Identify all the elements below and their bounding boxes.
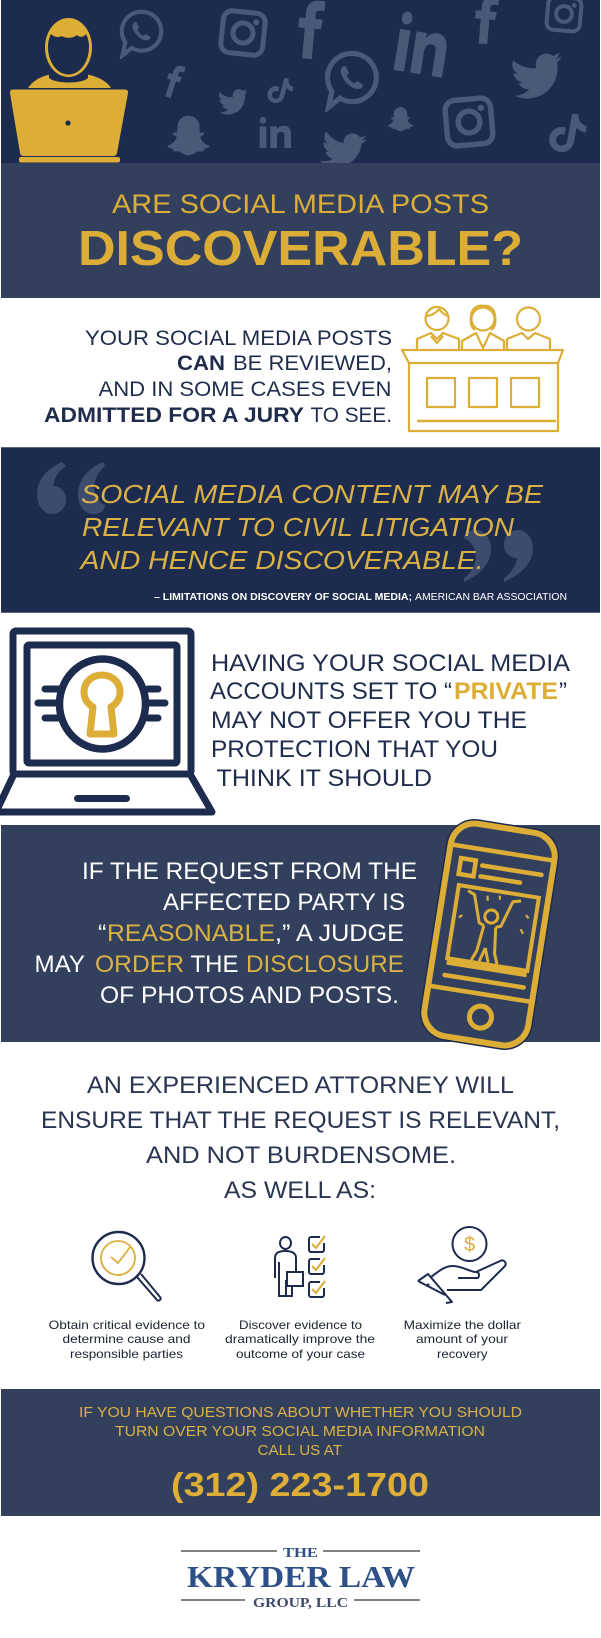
icon: snapchat large <box>168 116 209 155</box>
icon: hand holding dollar coin <box>418 1227 506 1303</box>
text block: reasonable request: DISCLOSURE <box>246 951 404 978</box>
call to action text: IF YOU HAVE QUESTIONS ABOUT WHETHER YOU SHOULD <box>79 1405 522 1421</box>
icon: closing quote mark <box>464 530 533 582</box>
text block: reasonable request: “ <box>98 920 106 947</box>
quote attribution: – LIMITATIONS ON DISCOVERY OF SOCIAL MEDIA; <box>154 592 412 603</box>
quote attribution <box>154 592 567 603</box>
text block: private accounts: ” <box>559 678 567 705</box>
text block: reasonable request: OF PHOTOS AND POSTS. <box>100 982 399 1009</box>
icon: twitter large <box>509 51 567 101</box>
icon: linkedin small <box>260 117 291 148</box>
icon: person at laptop <box>10 18 128 162</box>
call to action text: TURN OVER YOUR SOCIAL MEDIA INFORMATION <box>115 1424 485 1440</box>
call to action text <box>79 1405 522 1459</box>
quote text: SOCIAL MEDIA CONTENT MAY BE <box>81 479 544 509</box>
quote attribution: AMERICAN BAR ASSOCIATION <box>415 592 567 603</box>
text block: reasonable request: REASONABLE <box>107 920 275 947</box>
heading: discoverable: DISCOVERABLE? <box>78 222 523 276</box>
caption: critical evidence: responsible parties <box>70 1347 183 1361</box>
icon: linkedin large <box>394 11 451 78</box>
text block: posts can be reviewed: BE REVIEWED, <box>233 352 392 375</box>
text block: reasonable request: IF THE REQUEST FROM THE <box>82 858 417 885</box>
heading: are social media posts: ARE SOCIAL MEDIA POSTS <box>112 189 489 219</box>
icon: whatsapp small <box>122 12 161 55</box>
caption: critical evidence: determine cause and <box>62 1332 190 1346</box>
text block: experienced attorney <box>41 1072 560 1204</box>
text block: private accounts: PRIVATE <box>454 678 558 705</box>
panel: call to action band <box>1 1389 600 1516</box>
icon: facebook small <box>162 63 186 100</box>
text block: reasonable request <box>34 858 417 1009</box>
caption: critical evidence: Obtain critical evidence to <box>49 1318 205 1332</box>
text block: private accounts <box>210 650 570 792</box>
text block: reasonable request: AFFECTED PARTY IS <box>163 889 405 916</box>
caption: maximize recovery: amount of your <box>416 1332 508 1346</box>
text block: private accounts: PROTECTION THAT YOU <box>211 736 498 763</box>
text block: posts can be reviewed: CAN <box>177 352 225 375</box>
icon: instagram large <box>444 97 494 147</box>
panel: quotation band <box>1 447 600 613</box>
icon: facebook large <box>296 0 326 60</box>
icon: snapchat small <box>388 107 413 131</box>
caption: discover evidence: outcome of your case <box>236 1347 365 1361</box>
caption: maximize recovery: Maximize the dollar <box>404 1318 521 1332</box>
text block: posts can be reviewed: ADMITTED FOR A JURY <box>44 404 304 427</box>
icon: tiktok small <box>266 75 295 107</box>
icon: twitter bottom <box>319 129 367 171</box>
icon: twitter small <box>217 89 250 115</box>
text block: posts can be reviewed <box>44 327 392 427</box>
icon: instagram corner <box>546 0 582 32</box>
text block: reasonable request: MAY <box>34 951 85 978</box>
caption: maximize recovery: recovery <box>437 1347 488 1361</box>
icon: opening quote mark <box>37 462 105 514</box>
text block: posts can be reviewed: TO SEE. <box>310 404 392 427</box>
icon: facebook top <box>473 0 499 45</box>
icon: smartphone with photo post <box>420 820 559 1049</box>
quote text: RELEVANT TO CIVIL LITIGATION <box>82 512 514 542</box>
icon: tiktok large <box>547 110 588 156</box>
icon: whatsapp large <box>328 53 376 107</box>
panel: reasonable request band <box>1 825 600 1042</box>
caption: discover evidence <box>225 1318 375 1361</box>
phone number: (312) 223-1700 <box>171 1466 429 1503</box>
logo: The Kryder Law Group: THE <box>283 1546 318 1561</box>
text block: reasonable request: ORDER <box>95 951 184 978</box>
quote text <box>78 479 544 575</box>
text block: experienced attorney: AND NOT BURDENSOME. <box>146 1142 456 1169</box>
text block: experienced attorney: ENSURE THAT THE REQUEST IS RELEVANT, <box>41 1107 560 1134</box>
text block: experienced attorney: AS WELL AS: <box>224 1177 376 1204</box>
icon: magnifying glass with check <box>92 1232 161 1301</box>
text block: private accounts: THINK IT SHOULD <box>216 765 432 792</box>
icon: jury box <box>402 306 563 431</box>
text block: private accounts: MAY NOT OFFER YOU THE <box>211 707 527 734</box>
icon: hand holding dollar coin: $ <box>464 1234 475 1256</box>
caption: discover evidence: dramatically improve the <box>225 1332 375 1346</box>
quote text: AND HENCE DISCOVERABLE. <box>78 545 483 575</box>
icon: person with checklist <box>275 1236 325 1297</box>
logo: The Kryder Law Group: KRYDER LAW <box>187 1559 415 1594</box>
caption: critical evidence <box>49 1318 205 1361</box>
text block: experienced attorney: AN EXPERIENCED ATTORNEY WILL <box>87 1072 514 1099</box>
icon: instagram <box>220 10 266 56</box>
text block: posts can be reviewed: YOUR SOCIAL MEDIA POSTS <box>85 327 392 350</box>
text block: private accounts: ACCOUNTS SET TO “ <box>210 678 452 705</box>
text block: posts can be reviewed: AND IN SOME CASES EVEN <box>98 378 392 401</box>
text block: reasonable request: THE <box>190 951 238 978</box>
icon: laptop with keyhole <box>0 631 212 812</box>
panel: title band <box>1 163 600 298</box>
header banner with social icons <box>1 0 600 171</box>
logo: The Kryder Law Group <box>181 1546 420 1611</box>
text block: reasonable request: ,” A JUDGE <box>275 920 404 947</box>
call to action text: CALL US AT <box>258 1443 342 1459</box>
logo: The Kryder Law Group: GROUP, LLC <box>253 1596 348 1611</box>
text block: private accounts: HAVING YOUR SOCIAL MEDIA <box>211 650 570 677</box>
caption: maximize recovery <box>404 1318 521 1361</box>
caption: discover evidence: Discover evidence to <box>239 1318 362 1332</box>
